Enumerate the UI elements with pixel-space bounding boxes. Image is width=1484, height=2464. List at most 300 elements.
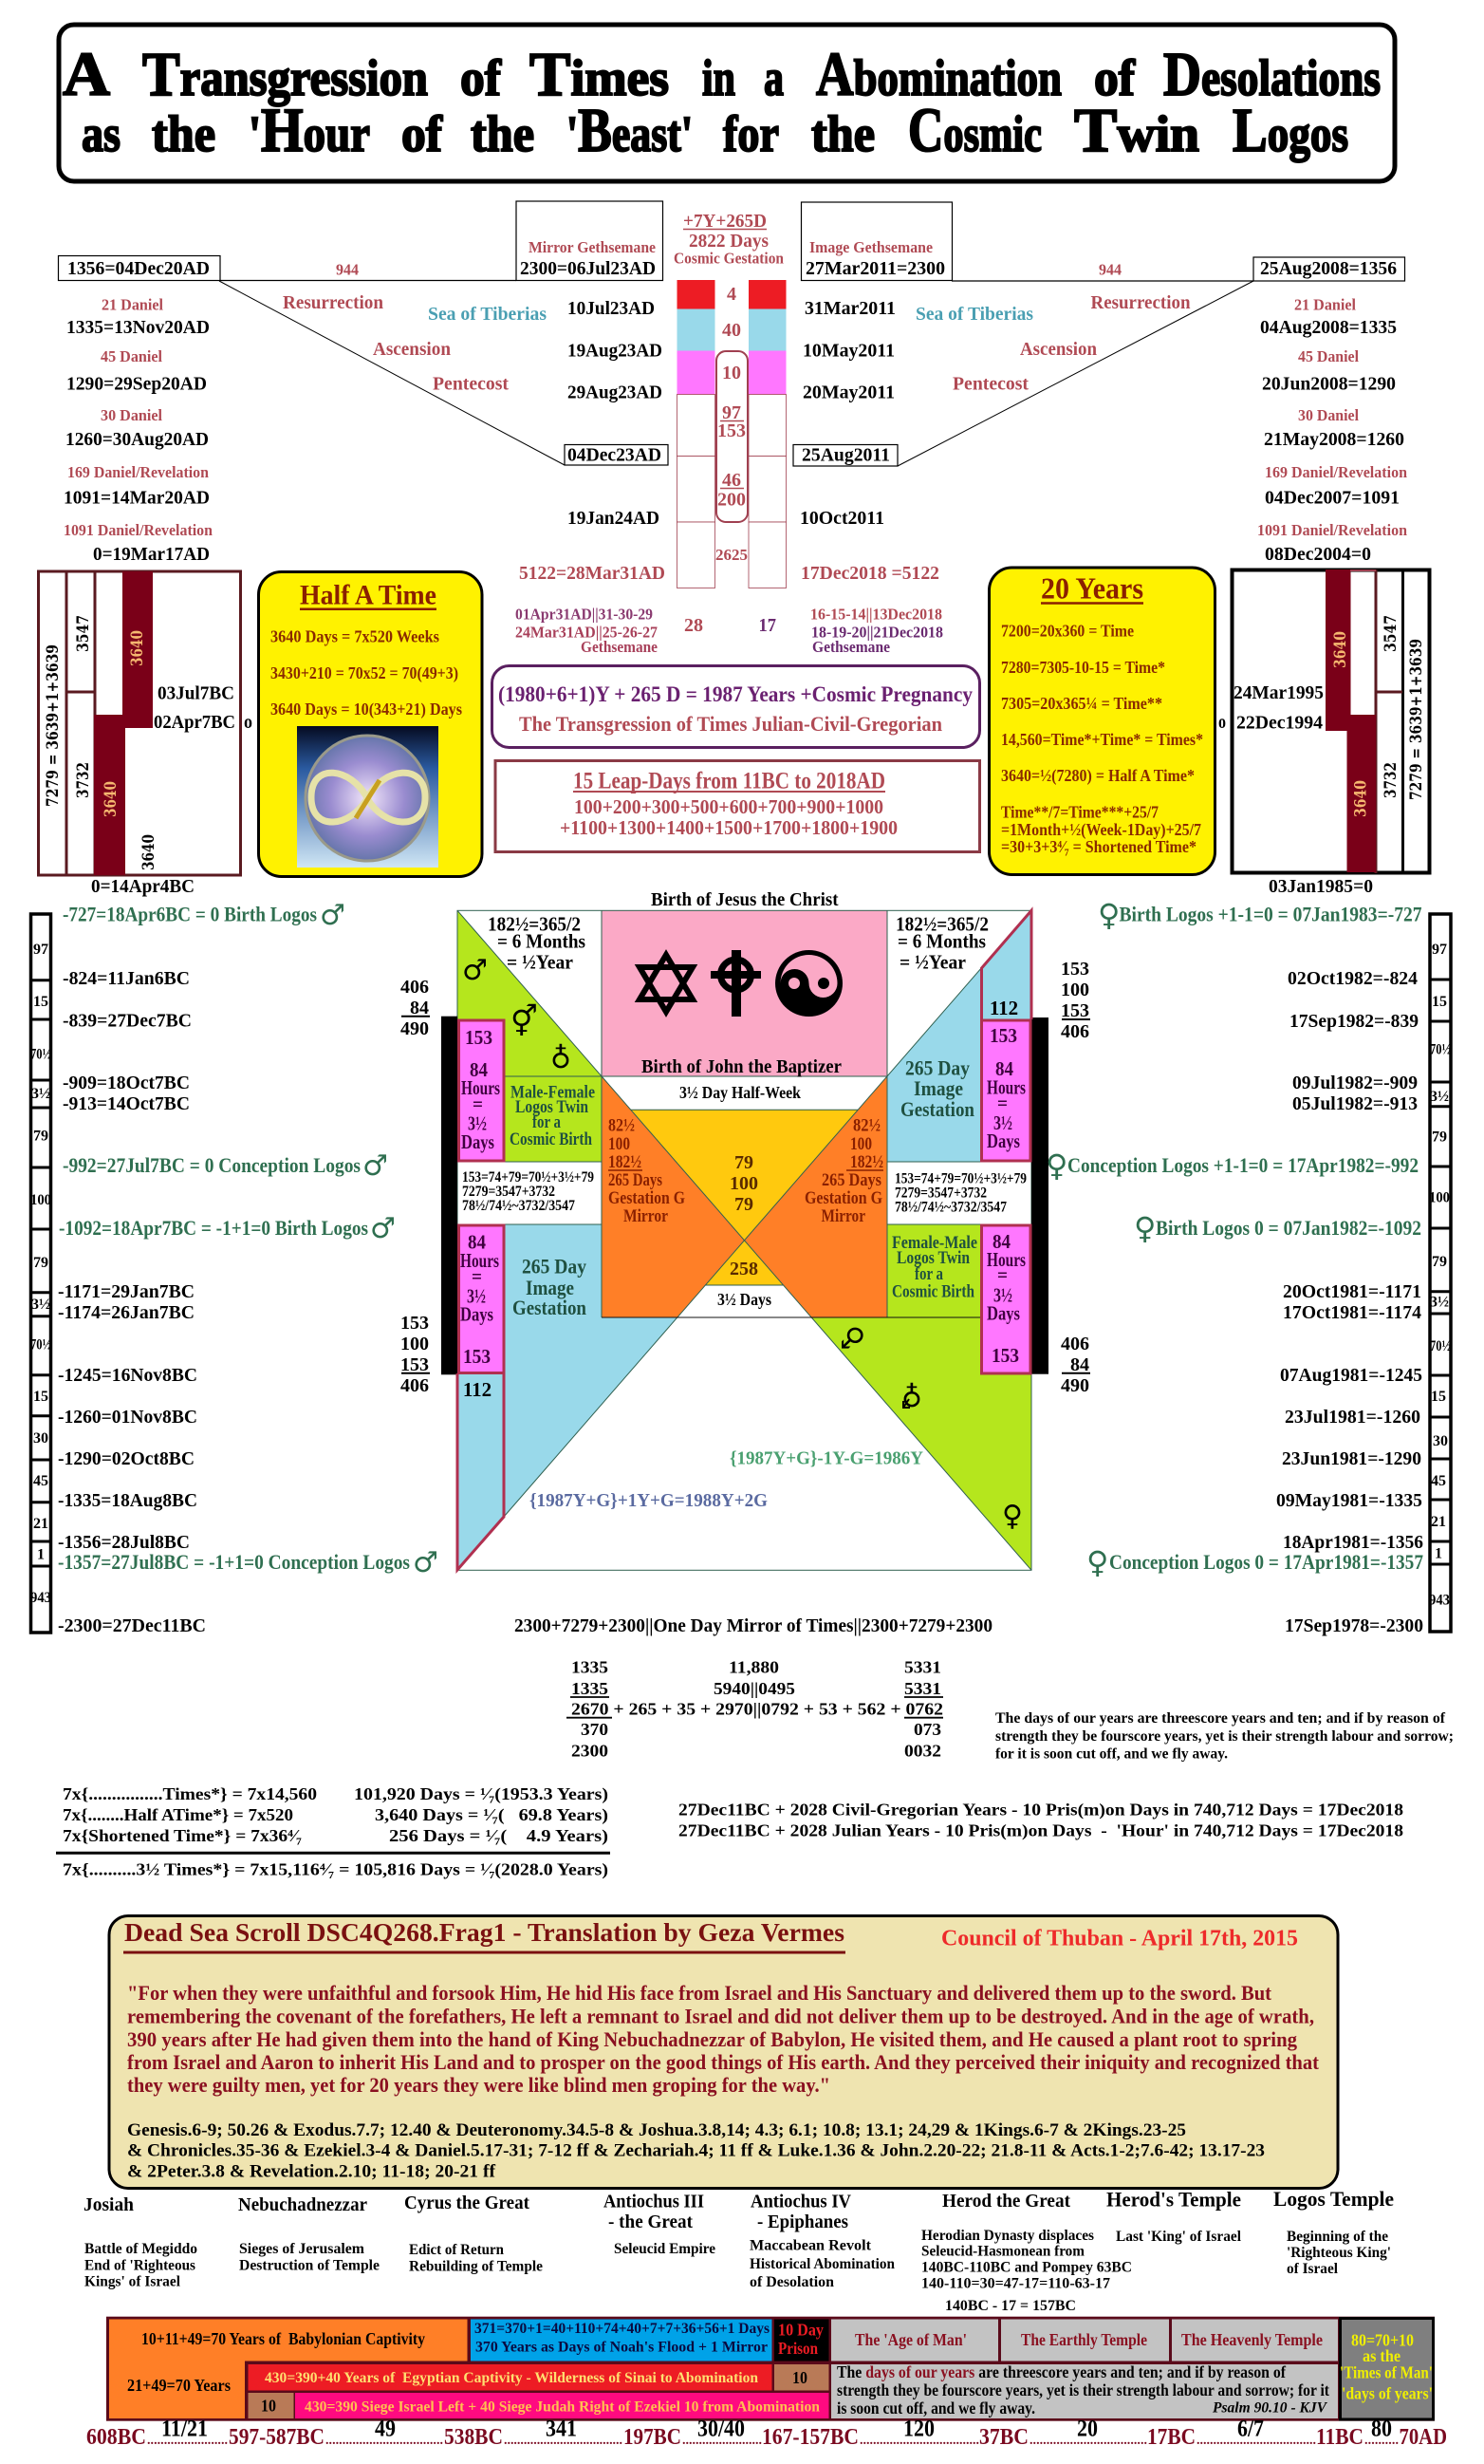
- panel: mirror date ladder (left): [59, 201, 668, 584]
- panel: central hourglass diagram: [441, 889, 1048, 1636]
- text block: left negative day dates: -1171=29Jan7BC: [58, 1281, 195, 1302]
- callout: 15 leap-days: 100+200+300+500+600+700+900+1000: [574, 795, 883, 818]
- panel: Half A Time: 3430+210 = 70x52 = 70(49+3): [270, 663, 458, 683]
- panel: image date ladder (right): 04Dec2007=1091: [1265, 488, 1400, 509]
- text block: 2028 year sums: 27Dec11BC + 2028 Civil-Gregorian Years - 10 Pris(m)on Days in 740,712 Days = 17Dec2018: [678, 1801, 1403, 1820]
- text block: scroll quotation: "For when they were unfaithful and forsook Him, He hid His face from Israel and His Sanctuary and delivered them up to the sword. But: [127, 1981, 1272, 2005]
- text block: historical figures: Beginning of the: [1287, 2229, 1388, 2245]
- text block: right negative day dates: 23Jul1981=-1260: [1285, 1407, 1420, 1428]
- panel: timeline blocks: 371=370+1=40+110+74+40+7+7+36+56+1 Days: [474, 2321, 770, 2337]
- title: the: [152, 105, 215, 162]
- text block: historical figures: 140BC-110BC and Pompey 63BC: [921, 2260, 1132, 2276]
- text block: central labels: Birth of John the Baptizer: [641, 1056, 842, 1077]
- panel: left day scale: 1: [37, 1547, 45, 1563]
- callout: 15 leap-days: +1100+1300+1400+1500+1700+1800+1900: [560, 816, 898, 839]
- panel: left day scale: 79: [33, 1129, 48, 1145]
- text block: times table: 101,920 Days = ¹⁄₇(1953.3 Years): [354, 1784, 608, 1804]
- text block: times table: 3,640 Days = ¹⁄₇( 69.8 Years): [375, 1805, 608, 1825]
- text block: Gethsemane dates: Gethsemane: [581, 638, 658, 656]
- text block: half-year labels: [488, 913, 989, 974]
- text block: right sums: [1061, 959, 1090, 1396]
- text block: historical figures: Rebuilding of Temple: [409, 2259, 543, 2275]
- text block: year equations: [529, 1448, 924, 1511]
- text block: central labels: 3½ Day Half-Week: [679, 1083, 801, 1102]
- text block: female-male twin: Cosmic Birth: [892, 1282, 974, 1302]
- text block: right orange gestation mirror: 82½: [853, 1116, 881, 1136]
- bar chart: 7279 day split (left): 3640: [102, 781, 121, 817]
- panel: timeline blocks: [106, 2317, 1435, 2421]
- text block: historical figures: Last 'King' of Israel: [1116, 2229, 1242, 2245]
- panel: left day scale: 97: [33, 942, 48, 958]
- text block: psalm note: [995, 1710, 1454, 1763]
- text block: Gethsemane dates: 24Mar31AD||25-26-27: [515, 624, 658, 642]
- panel: left day scale: 15: [33, 1389, 48, 1405]
- panel: left day scale: 943: [30, 1590, 51, 1606]
- panel: image date ladder (right): 25Aug2008=1356: [1260, 258, 1397, 279]
- text block: right negative day dates: 09Jul1982=-909: [1292, 1073, 1418, 1093]
- text block: addition sums: 073: [914, 1720, 941, 1739]
- text block: left negative day dates: -1357=27Jul8BC = -1+1=0 Conception Logos: [58, 1550, 410, 1574]
- panel: left day scale: [30, 914, 51, 1633]
- text block: right sums: 153: [1061, 959, 1089, 980]
- text block: image gestation labels: Image: [526, 1276, 574, 1299]
- panel: 20 Years: =1Month+½(Week-1Day)+25/7: [1001, 820, 1201, 840]
- title: Logos: [1233, 96, 1348, 165]
- text block: times table: 7x{................Times*} = 7x14,560: [63, 1784, 317, 1803]
- bar chart: 7279 day split (left): 7279 = 3639+1+3639: [44, 644, 63, 807]
- panel: cosmic gestation column: 97: [722, 402, 741, 423]
- panel: cosmic gestation column: 2625: [715, 546, 748, 564]
- panel: mirror date ladder (left): 29Aug23AD: [567, 383, 662, 403]
- title: Transgression: [142, 40, 428, 109]
- text block: Gethsemane dates: 16-15-14||13Dec2018: [810, 606, 942, 624]
- text block: right orange gestation mirror: 182½: [850, 1152, 883, 1172]
- text block: left negative day dates: -839=27Dec7BC: [63, 1011, 192, 1032]
- panel: mirror date ladder (left): 5122=28Mar31AD: [519, 563, 665, 584]
- text block: formula rows: 7279=3547+3732: [895, 1185, 987, 1202]
- panel: cosmic gestation column: 10: [722, 363, 741, 383]
- panel: mirror date ladder (left): 1260=30Aug20AD: [65, 429, 209, 450]
- text block: left sums: 100: [400, 1334, 429, 1354]
- panel: 112 cells with red diagonals: 112: [463, 1378, 492, 1401]
- text block: Gethsemane dates: 18-19-20||21Dec2018: [811, 624, 943, 642]
- panel: right day scale: 943: [1429, 1593, 1450, 1609]
- icon: gender symbols: ♂: [462, 954, 488, 987]
- bar chart: 7279 day split (right): 7279 = 3639+1+3639: [1407, 639, 1426, 800]
- panel: timeline blocks: 'days of years': [1342, 2384, 1433, 2403]
- text block: historical figures: Destruction of Temple: [239, 2258, 380, 2274]
- text block: right negative day dates: ♀: [1098, 897, 1120, 933]
- panel: mirror date ladder (left): 30 Daniel: [101, 406, 162, 424]
- title: [59, 25, 1395, 181]
- text block: times table: 7x{........Half ATime*} = 7x520: [63, 1805, 293, 1824]
- text block: scroll quotation: [127, 1981, 1320, 2097]
- panel: timeline blocks: strength they be fourscore years, yet is their strength labour and sorrow; for it: [837, 2380, 1329, 2399]
- text block: historical figures: of Desolation: [750, 2274, 834, 2290]
- panel: mirror date ladder (left): Resurrection: [283, 292, 383, 313]
- panel: pink 84 hours cells: 153: [465, 1026, 492, 1049]
- text block: left orange gestation mirror: 265 Days: [608, 1170, 662, 1190]
- panel: central hourglass diagram: 2300+7279+2300||One Day Mirror of Times||2300+7279+2300: [514, 1615, 992, 1636]
- panel: pink 84 hours cells: 84: [468, 1231, 486, 1254]
- panel: cosmic gestation column: +7Y+265D: [683, 211, 767, 232]
- panel: pink 84 hours cells: 3½: [468, 1112, 487, 1135]
- panel: image date ladder (right): 21May2008=1260: [1264, 429, 1404, 450]
- panel: 20 Years: 7200=20x360 = Time: [1001, 622, 1134, 641]
- panel: pink 84 hours cells: Days: [460, 1303, 493, 1326]
- text block: left sums: 406: [400, 977, 429, 998]
- panel: mirror date ladder (left): Pentecost: [433, 374, 509, 395]
- bar chart: 7279 day split (right): 3640: [1331, 631, 1350, 668]
- text block: addition sums: 2300: [571, 1742, 608, 1761]
- panel: timeline blocks: is soon cut off, and we fly away.: [837, 2399, 1035, 2417]
- panel: left day scale: 3½: [31, 1086, 50, 1102]
- title: a: [764, 49, 784, 106]
- panel: image date ladder (right): 20May2011: [803, 383, 895, 403]
- text block: formula rows: [462, 1169, 1027, 1216]
- text block: right orange gestation mirror: Gestation G: [805, 1188, 882, 1208]
- panel: image date ladder (right): 169 Daniel/Revelation: [1265, 463, 1408, 481]
- panel: left day scale: 21: [33, 1516, 48, 1532]
- panel: left day scale: 30: [33, 1430, 48, 1447]
- panel: pink 84 hours cells: =: [473, 1092, 483, 1115]
- panel: mirror date ladder (left): 1091 Daniel/Revelation: [64, 521, 213, 539]
- panel: right day scale: 21: [1431, 1514, 1446, 1530]
- text block: historical figures: Sieges of Jerusalem: [239, 2241, 365, 2257]
- text block: central labels: 79: [734, 1152, 753, 1173]
- text block: male-female twin: for a: [532, 1112, 561, 1132]
- icon: gender symbols: ♀: [1002, 1500, 1023, 1533]
- text block: image gestation labels: Image: [914, 1076, 963, 1100]
- callout: 15 leap-days: [495, 761, 979, 852]
- panel: image date ladder (right): Resurrection: [1091, 292, 1190, 313]
- title: Times: [529, 40, 669, 109]
- icon: gender symbols: ♁: [901, 1381, 922, 1414]
- panel: image date ladder (right): 17Dec2018 =5122: [801, 563, 939, 584]
- text block: left negative day dates: -1290=02Oct8BC: [58, 1448, 195, 1469]
- callout: 1987 years cosmic pregnancy: (1980+6+1)Y + 265 D = 1987 Years +Cosmic Pregnancy: [498, 682, 973, 706]
- text block: formula rows: 78½/74½~3732/3547: [895, 1200, 1007, 1216]
- text block: central labels: 79: [734, 1194, 753, 1215]
- text block: right negative day dates: Birth Logos 0 = 07Jan1982=-1092: [1156, 1216, 1421, 1240]
- text block: 2028 year sums: 27Dec11BC + 2028 Julian Years - 10 Pris(m)on Days - 'Hour' in 740,712 Days = 17Dec2018: [678, 1821, 1403, 1841]
- bar chart: 7279 day split (right): 22Dec1994: [1236, 713, 1323, 734]
- panel: cosmic gestation column: 40: [722, 320, 741, 341]
- panel: image date ladder (right): 04Aug2008=1335: [1260, 317, 1397, 338]
- bar chart: 7279 day split (right): o: [1218, 712, 1226, 733]
- panel: 20 Years: 7280=7305-10-15 = Time*: [1001, 658, 1165, 677]
- text block: left sums: 490: [400, 1018, 429, 1039]
- panel: timeline blocks: 430=390 Siege Israel Left + 40 Siege Judah Right of Ezekiel 10 from Abomination: [305, 2399, 820, 2416]
- text block: bottom timeline dates: 30/40: [697, 2417, 745, 2442]
- text block: central labels: 3½ Days: [717, 1290, 771, 1309]
- panel: Half A Time: 3640 Days = 7x520 Weeks: [270, 627, 439, 646]
- panel: mirror date ladder (left): 944: [336, 260, 359, 278]
- panel: left day scale: 3½: [31, 1297, 50, 1313]
- text block: historical figures: Seleucid-Hasmonean from: [921, 2244, 1085, 2260]
- panel: right day scale: 45: [1431, 1473, 1446, 1489]
- panel: 112 cells with red diagonals: [457, 910, 1031, 1570]
- panel: image date ladder (right): 10May2011: [803, 340, 895, 361]
- icon: gender symbols: [462, 954, 1023, 1533]
- panel: timeline blocks: 10 Day: [778, 2321, 824, 2340]
- panel: central hourglass diagram: Birth of Jesus the Christ: [651, 889, 839, 910]
- panel: pink 84 hours cells: Hours: [460, 1249, 499, 1272]
- panel: pink 84 hours cells: =: [472, 1265, 482, 1288]
- panel: 20 Years: 3640=½(7280) = Half A Time*: [1001, 766, 1195, 786]
- text block: bottom timeline dates: ....................................: [860, 2434, 979, 2448]
- text block: left negative day dates: -992=27Jul7BC = 0 Conception Logos: [63, 1153, 361, 1177]
- text block: central labels: 100: [730, 1173, 758, 1194]
- text block: left sums: [400, 977, 430, 1396]
- title: of: [1094, 49, 1136, 106]
- text block: times table: 7x{Shortened Time*} = 7x36⁴⁄₇: [63, 1826, 302, 1845]
- text block: bottom timeline dates: 37BC: [979, 2425, 1029, 2450]
- callout: 15 leap-days: 15 Leap-Days from 11BC to 2018AD: [573, 769, 885, 794]
- panel: pink 84 hours cells: 153: [463, 1345, 491, 1368]
- bar chart: 7279 day split (right): [1218, 569, 1429, 897]
- text block: bottom timeline dates: 20: [1077, 2417, 1098, 2442]
- icon: black side bars: [441, 1017, 1048, 1374]
- panel: image date ladder (right): 27Mar2011=2300: [806, 258, 945, 279]
- text block: bottom timeline dates: 608BC: [86, 2425, 146, 2450]
- text block: bottom timeline dates: 197BC: [623, 2425, 681, 2450]
- text block: left orange gestation mirror: 82½: [608, 1116, 635, 1136]
- panel: timeline blocks: The Heavenly Temple: [1181, 2330, 1323, 2349]
- title: Twin: [1074, 96, 1199, 165]
- text block: bottom timeline dates: 70AD: [1399, 2425, 1447, 2450]
- panel: cosmic gestation column: 200: [717, 490, 746, 511]
- title: of: [401, 105, 443, 162]
- text block: left sums: 153: [400, 1354, 429, 1375]
- text block: scroll quotation: from Israel and Aaron to inherit His Land and to prosper on the good things of His earth. And they perceived their iniquity and recognized that: [127, 2050, 1320, 2074]
- panel: mirror date ladder (left): 21 Daniel: [102, 296, 163, 313]
- text block: times table: [56, 1784, 610, 1880]
- heading: scroll title: Dead Sea Scroll DSC4Q268.Frag1 - Translation by Geza Vermes: [124, 1918, 844, 1947]
- text block: left negative day dates: -727=18Apr6BC = 0 Birth Logos: [63, 903, 317, 926]
- panel: mirror date ladder (left): 45 Daniel: [101, 347, 162, 365]
- text block: historical figures: Cyrus the Great: [404, 2193, 529, 2213]
- text block: left orange gestation mirror: 100: [608, 1134, 630, 1154]
- text block: addition sums: 11,880: [729, 1658, 779, 1677]
- text block: bottom timeline dates: ....................................: [1196, 2434, 1316, 2448]
- text block: times table: 256 Days = ¹⁄₇( 4.9 Years): [389, 1826, 608, 1846]
- text block: central labels: [641, 1056, 842, 1309]
- panel: image date ladder (right): 31Mar2011: [805, 298, 896, 319]
- text block: right orange gestation mirror: Mirror: [822, 1206, 865, 1226]
- panel: 112 cells with red diagonals: 112: [990, 997, 1018, 1019]
- text block: bottom timeline dates: 597-587BC: [229, 2425, 325, 2450]
- text block: right orange gestation mirror: [805, 1116, 883, 1226]
- text block: right negative day dates: ♀: [1086, 1544, 1108, 1580]
- text block: left negative day dates: -1335=18Aug8BC: [58, 1490, 197, 1511]
- text block: scripture references: & 2Peter.3.8 & Revelation.2.10; 11-18; 20-21 ff: [127, 2161, 496, 2181]
- text block: female-male twin: Logos Twin: [897, 1248, 970, 1268]
- icon: infinity orb picture: [297, 726, 438, 868]
- panel: mirror date ladder (left): 1290=29Sep20AD: [66, 374, 207, 395]
- panel: timeline blocks: as the: [1363, 2346, 1401, 2365]
- panel: mirror date ladder (left): 1356=04Dec20AD: [67, 258, 210, 279]
- text block: bottom timeline dates: 167-157BC: [762, 2425, 859, 2450]
- panel: pink 84 hours cells: 3½: [993, 1284, 1012, 1307]
- text block: historical figures: Historical Abomination: [750, 2256, 895, 2272]
- text block: left negative day dates: -1356=28Jul8BC: [58, 1532, 190, 1553]
- text block: half-year labels: = ½Year: [900, 951, 966, 974]
- text block: central labels: 258: [730, 1259, 758, 1279]
- panel: Dead Sea Scroll: [109, 1915, 1338, 2189]
- panel: mirror date ladder (left): 2300=06Jul23AD: [520, 258, 656, 279]
- text block: historical figures: of Israel: [1287, 2261, 1339, 2277]
- panel: right day scale: 79: [1432, 1254, 1447, 1270]
- text block: right negative day dates: 20Oct1981=-1171: [1283, 1281, 1421, 1302]
- title: Desolations: [1163, 40, 1381, 109]
- panel: cosmic gestation column: 2822 Days: [689, 231, 769, 252]
- text block: times table: 7x{..........3½ Times*} = 7x15,116⁴⁄₇ = 105,816 Days = ¹⁄₇(2028.0 Years): [63, 1860, 608, 1880]
- text block: right sums: 406: [1061, 1021, 1089, 1042]
- icon: yin yang: [775, 950, 843, 1017]
- text block: right negative day dates: 05Jul1982=-913: [1292, 1093, 1418, 1114]
- panel: timeline blocks: Psalm 90.10 - KJV: [1212, 2400, 1327, 2417]
- text block: bottom timeline dates: 17BC: [1147, 2425, 1196, 2450]
- text block: historical figures: Kings' of Israel: [84, 2274, 181, 2290]
- text block: addition sums: 1335: [571, 1658, 608, 1677]
- panel: image date ladder (right): 1091 Daniel/Revelation: [1257, 521, 1408, 539]
- text block: right negative day dates: 17Sep1978=-2300: [1285, 1615, 1423, 1636]
- text block: half-year labels: = 6 Months: [497, 930, 585, 953]
- text block: year equations: {1987Y+G}-1Y-G=1986Y: [730, 1448, 924, 1469]
- panel: mirror date ladder (left): Ascension: [373, 339, 451, 360]
- text block: male-female twin: Male-Female: [510, 1083, 595, 1103]
- text block: male-female twin: Logos Twin: [515, 1097, 588, 1117]
- text block: formula rows: 78½/74½~3732/3547: [462, 1198, 575, 1214]
- text block: Gethsemane dates: 01Apr31AD||31-30-29: [515, 606, 653, 624]
- panel: timeline blocks: 10: [792, 2368, 807, 2387]
- text block: female-male twin: for a: [915, 1264, 943, 1284]
- text block: male-female twin: [510, 1083, 595, 1149]
- panel: timeline blocks: 370 Years as Days of Noah's Flood + 1 Mirror: [475, 2340, 768, 2356]
- text block: left negative day dates: ♂: [320, 899, 345, 932]
- panel: left day scale: 70½: [30, 1047, 51, 1063]
- panel: Half A Time: 3640 Days = 10(343+21) Days: [270, 700, 462, 719]
- panel: timeline blocks: The days of our years are threescore years and ten; and if by reason of: [837, 2362, 1287, 2381]
- panel: timeline blocks: The Earthly Temple: [1021, 2330, 1147, 2349]
- text block: bottom timeline dates: ........................: [682, 2434, 762, 2448]
- panel: mirror date ladder (left): 0=19Mar17AD: [93, 544, 210, 565]
- panel: pink 84 hours cells: 3½: [993, 1111, 1012, 1134]
- title: the: [471, 105, 534, 162]
- bar chart: 7279 day split (left): 03Jul7BC: [158, 683, 234, 704]
- panel: image date ladder (right): 08Dec2004=0: [1265, 544, 1371, 565]
- text block: left orange gestation mirror: 182½: [608, 1152, 641, 1172]
- text block: bottom timeline dates: 49: [375, 2417, 396, 2442]
- text block: right orange gestation mirror: 100: [850, 1134, 872, 1154]
- icon: gender symbols: ⚥: [510, 1003, 538, 1039]
- panel: 20 Years: 14,560=Time*+Time* = Times*: [1001, 730, 1203, 749]
- text block: left sums: 84: [410, 998, 429, 1018]
- text block: bottom timeline dates: ....................................: [504, 2434, 622, 2448]
- text block: bottom timeline dates: 6/7: [1237, 2417, 1264, 2442]
- icon: gender symbols: ♂: [840, 1320, 865, 1353]
- text block: year equations: {1987Y+G}+1Y+G=1988Y+2G: [529, 1490, 768, 1511]
- panel: mirror date ladder (left): 10Jul23AD: [567, 298, 655, 319]
- panel: right day scale: 3½: [1430, 1089, 1449, 1105]
- text block: image gestation labels: Gestation: [900, 1097, 974, 1121]
- text block: right sums: 490: [1061, 1375, 1089, 1396]
- text block: Gethsemane dates: 28: [684, 615, 703, 636]
- panel: mirror date ladder (left): 19Aug23AD: [567, 340, 662, 361]
- text block: image gestation labels: 265 Day: [522, 1255, 586, 1279]
- text block: right negative day dates: ♀: [1046, 1148, 1067, 1184]
- text block: left negative day dates: -913=14Oct7BC: [63, 1093, 190, 1114]
- text block: historical figures: Maccabean Revolt: [750, 2238, 872, 2254]
- text block: historical figures: Seleucid Empire: [614, 2241, 715, 2257]
- text block: left negative day dates: -909=18Oct7BC: [63, 1073, 190, 1093]
- panel: timeline blocks: The 'Age of Man': [855, 2330, 967, 2349]
- callout: 1987 years cosmic pregnancy: [492, 666, 979, 748]
- panel: timeline blocks: 'Times of Man': [1340, 2363, 1433, 2382]
- text block: right negative day dates: 17Sep1982=-839: [1289, 1011, 1419, 1032]
- text block: right orange gestation mirror: 265 Days: [822, 1170, 881, 1190]
- panel: mirror date ladder (left): 1091=14Mar20AD: [64, 488, 210, 509]
- title: as: [82, 105, 121, 162]
- bar chart: 7279 day split (left): 3547: [74, 615, 93, 652]
- bar chart: 7279 day split (right): 3547: [1382, 615, 1401, 652]
- text block: female-male twin: [892, 1233, 977, 1302]
- text block: psalm note: strength they be fourscore years, yet is their strength labour and sorrow;: [995, 1728, 1454, 1745]
- text block: right negative day dates: 02Oct1982=-824: [1288, 968, 1418, 989]
- text block: left negative day dates: -824=11Jan6BC: [63, 968, 190, 989]
- panel: cosmic gestation column: [674, 211, 786, 588]
- panel: timeline blocks: 10: [261, 2397, 276, 2416]
- panel: image date ladder (right): Image Gethsemane: [809, 238, 933, 256]
- panel: mirror date ladder (left): Sea of Tiberias: [428, 304, 547, 325]
- text block: historical figures: Herod's Temple: [1106, 2187, 1241, 2211]
- text block: addition sums: 5331: [904, 1658, 941, 1677]
- panel: timeline blocks: Prison: [778, 2339, 818, 2358]
- panel: mirror date ladder (left): 19Jan24AD: [567, 508, 659, 529]
- panel: cosmic gestation column: 46: [722, 470, 741, 491]
- text block: bottom timeline dates: ...................................: [325, 2434, 443, 2448]
- panel: 20 Years: Time**/7=Time***+25/7: [1001, 803, 1159, 822]
- panel: right day scale: 15: [1432, 994, 1447, 1010]
- icon: gender symbols: ♁: [550, 1042, 571, 1075]
- text block: right sums: 100: [1061, 980, 1089, 1000]
- text block: left negative day dates: -1245=16Nov8BC: [58, 1365, 197, 1386]
- panel: 20 Years: [989, 568, 1215, 875]
- text block: historical figures: 'Righteous King': [1287, 2245, 1391, 2261]
- text block: formula rows: 7279=3547+3732: [462, 1184, 555, 1200]
- text block: male-female twin: Cosmic Birth: [510, 1129, 592, 1149]
- panel: right day scale: 97: [1432, 942, 1447, 958]
- panel: right day scale: 15: [1431, 1389, 1446, 1405]
- panel: pink 84 hours cells: 84: [992, 1230, 1011, 1253]
- panel: left day scale: 70½: [30, 1337, 51, 1353]
- text block: historical figures: Nebuchadnezzar: [238, 2194, 367, 2215]
- text block: half-year labels: = ½Year: [507, 951, 573, 974]
- panel: mirror date ladder (left): Mirror Gethsemane: [529, 238, 656, 256]
- text block: addition sums: 370: [581, 1720, 608, 1739]
- panel: Half A Time: Half A Time: [300, 580, 436, 611]
- text block: right negative day dates: 07Aug1981=-1245: [1280, 1365, 1422, 1386]
- text block: left orange gestation mirror: [608, 1116, 685, 1226]
- title: 'Hour: [249, 96, 370, 165]
- panel: 20 Years: 20 Years: [1041, 571, 1143, 606]
- text block: left negative day dates: -1260=01Nov8BC: [58, 1407, 197, 1428]
- text block: left negative day dates: ♂: [413, 1546, 438, 1579]
- text block: left orange gestation mirror: Gestation G: [608, 1188, 685, 1208]
- text block: scripture references: & Chronicles.35-36 & Ezekiel.3-4 & Daniel.5.17-31; 7-12 ff & Zechariah.4; 11 ff & Luke.1.36 & John.2.20-22; 21.8-11 & Acts.1-2;7.6-42; 13.17-23: [127, 2141, 1265, 2161]
- panel: pink 84 hours cells: =: [997, 1092, 1008, 1114]
